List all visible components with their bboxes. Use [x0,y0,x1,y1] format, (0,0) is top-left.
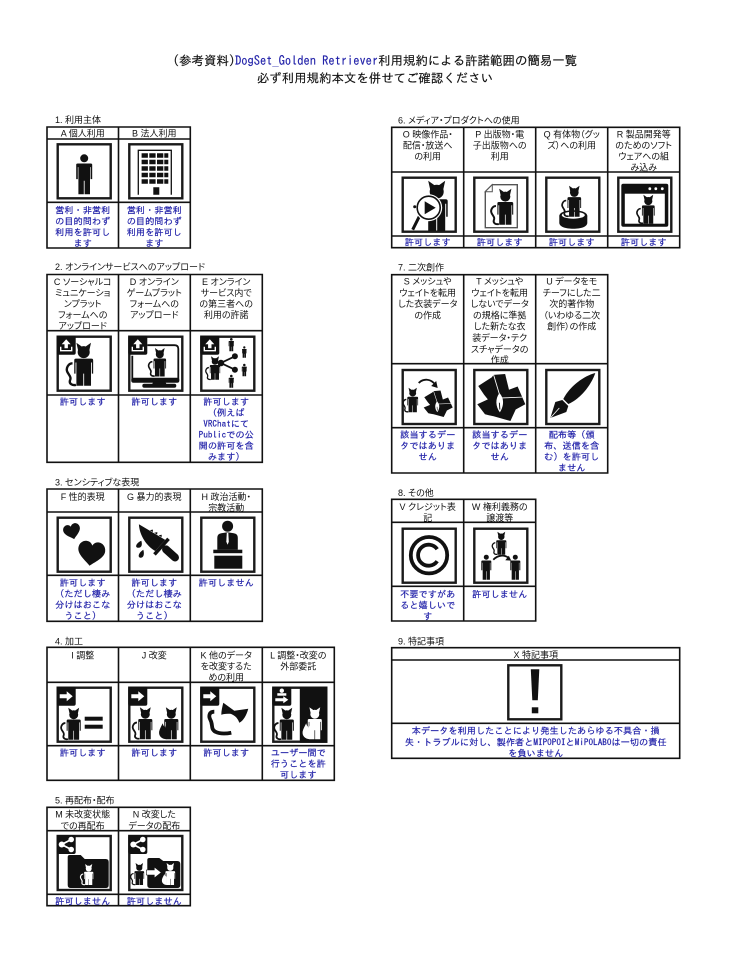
permission: K: 許可します [203,748,249,758]
icon: goods figure [546,178,599,232]
permission: Q: 許可します [549,238,595,248]
header: V: 記 [423,513,432,523]
icon: copyright [403,529,456,583]
header: K: めの利用 [208,672,244,682]
header: D: アップロード [130,310,179,320]
header: R: のためのソフト [615,140,672,150]
permission: G: （ただし棲み [127,589,182,599]
permission: U: 布、送信を含 [544,441,600,451]
header: T: スチャデータの [471,343,529,354]
permission: X: 失・トラブルに対し、製作者とMIPOPOIとMiPOLABOは一切の責任 [405,738,667,748]
header: B: B 法人利用 [132,128,177,138]
title [173,54,577,84]
header: D: D オンライン [130,277,179,287]
header: O: 配信・放送へ [403,140,453,150]
permission: B: 利用を許可し [127,228,182,238]
permission: S: 該当するデー [400,430,455,440]
panel: 4 加工: 4. 加工 [55,636,83,646]
permission: B: 営利・非営利 [127,206,182,216]
panel: 4 加工 [47,636,334,780]
icon: new clothing [474,370,527,424]
permission: M: 許可しません [55,896,110,906]
icon: upload avatar [57,336,111,391]
permission: B: ます [145,240,163,248]
permission: V: す [423,612,432,622]
permission: A: 利用を許可し [55,228,110,238]
header: W: 譲渡等 [486,512,513,523]
header: R: R 製品開発等 [617,128,671,140]
panel: 2 オンラインサービスへのアップロード [47,262,262,462]
permission: C: 許可します [60,397,106,407]
permission: E: VRChatにて [203,420,249,429]
header: E: 利用の許諾 [204,309,249,320]
permission: S: タではありま [400,441,455,451]
header: R: ウェアへの組 [618,150,669,162]
header: V: V クレジット表 [400,502,456,512]
header: R: み込み [630,162,657,172]
header: S: の作成 [414,309,441,320]
permission: L: ユーザー間で [271,748,326,758]
header: H: H 政治活動・ [201,491,251,502]
header: U: U データをモ [546,276,597,286]
permission: X: を負いません [508,748,563,758]
header: N: データの配布 [128,820,180,831]
permission: G: 分けはおこな [127,600,182,610]
permission: L: 行うことを許 [271,759,326,769]
header: K: を改変するた [201,660,252,672]
icon: adjust [57,687,111,742]
permission: F: 分けはおこな [55,600,110,610]
icon: rights transfer [474,529,527,583]
header: E: サービス内で [200,287,252,298]
header: L: 外部委託 [280,660,316,672]
icon: fountain pen [546,370,599,424]
permission: F: 許可します [60,578,106,588]
icon: modify [128,687,182,742]
permission: E: 許可します [203,397,249,407]
permission: R: 許可します [621,238,667,248]
header: G: G 暴力的表現 [127,491,182,502]
panel: 9 特記事項 [392,636,680,758]
header: T: しないでデータ [471,298,529,309]
header: Q: ズ）への利用 [547,140,596,150]
permission: F: うこと） [64,611,101,621]
icon: exclamation [508,665,561,719]
icon: software window [618,178,671,232]
header: M: での再配布 [60,820,105,831]
permission: X: 本データを利用したことにより発生したあらゆる不具合・損 [412,726,660,736]
header: W: W 権利義務の [472,501,528,512]
permission: G: うこと） [136,611,173,621]
header: O: O 映像作品・ [403,128,453,140]
header: H: 宗教活動 [208,502,244,513]
header: C: アップロード [58,321,107,331]
header: D: ゲームプラット [127,287,182,298]
header: J: J 改変 [142,650,167,660]
header: N: N 改変した [133,808,176,820]
icon: modified data folder [128,835,182,890]
panel: 9 特記事項: 9. 特記事項 [398,636,444,646]
header: U: 次的著作物 [549,298,594,309]
permission: P: 許可します [477,238,523,248]
panel: 8 その他 [392,487,536,622]
icon: person [58,144,111,198]
permission: U: 配布等（頒 [549,430,595,440]
permission: H: 許可しません [199,578,254,588]
header: D: フォームへの [130,299,179,309]
header: L: L 調整・改変の [270,650,327,660]
icon: parts reuse [200,687,254,742]
panel: 1 利用主体: 1. 利用主体 [55,114,101,125]
panel: 5 再配布・配布: 5. 再配布・配布 [55,794,115,806]
icon: hearts [58,518,111,572]
header: T: 作成 [491,354,509,365]
header: X: X 特記事項 [513,649,558,660]
header: C: ンプラット [64,299,102,309]
header: P: 子出版物への [473,140,527,150]
title: (参考資料)DogSet_Golden Retriever利用規約による許諾範囲の簡易一覧 [173,54,577,67]
permission: A: ます [74,240,92,248]
header: Q: Q 有体物（グッ [544,128,600,140]
permission: J: 許可します [131,748,177,758]
header: T: した新たな衣 [474,321,526,332]
header: T: T メッシュや [476,276,524,286]
permission: T: せん [491,452,509,462]
permission: A: の目的問わず [55,217,110,227]
permission: E: 開の許可を含 [199,441,255,451]
header: U: （いわゆる二次 [543,309,600,320]
icon: publication [474,178,527,232]
header: I: I 調整 [71,650,94,660]
header: E: E オンライン [202,277,251,287]
header: O: の利用 [414,150,441,162]
panel: 7 二次創作: 7. 二次創作 [398,262,444,272]
header: S: S メッシュや [404,276,452,286]
permission: B: の目的問わず [127,217,182,227]
permission: D: 許可します [131,397,177,407]
panel: 5 再配布・配布 [47,794,190,906]
permission: T: 該当するデー [472,430,527,440]
icon: upload to game [128,336,182,391]
panel: 3 センシティブな表現: 3. センシティブな表現 [55,476,139,488]
permission: T: タではありま [472,441,527,451]
icon: politician at lectern [201,518,254,572]
permission: A: 営利・非営利 [55,206,110,216]
header: K: K 他のデータ [201,650,252,660]
header: P: 利用 [491,150,509,162]
permission: E: Publicでの公 [199,430,254,440]
permission: E: （例えば [208,408,245,418]
header: C: C ソーシャルコ [54,277,112,287]
icon: video [403,178,456,232]
panel: 1 利用主体 [47,114,190,248]
panel: 8 その他: 8. その他 [398,487,434,498]
header: T: の規格に準拠 [473,309,526,320]
icon: building [129,144,182,198]
permission: V: 不要ですがあ [400,590,455,600]
header: C: フォームへの [58,310,108,320]
icon: knife [129,518,184,572]
header: F: F 性的表現 [61,491,105,502]
header: E: の第三者への [199,298,253,309]
icon: outsourcing [272,687,327,743]
header: A: A 個人利用 [61,128,105,138]
panel: 6 メディア・プロダクトへの使用: 6. メディア・プロダクトへの使用 [398,114,520,126]
permission: I: 許可します [60,748,106,758]
header: P: P 出版物・電 [475,128,524,140]
panel: 2 オンラインサービスへのアップロード: 2. オンラインサービスへのアップロード [55,262,205,272]
permission: S: せん [419,452,437,462]
title: 必ず利用規約本文を併せてご確認ください [257,72,493,84]
header: T: ウェイトを転用 [471,288,528,298]
header: S: ウェイトを転用 [399,288,456,298]
panel: 7 二次創作 [392,262,608,473]
header: M: M 未改変状態 [55,808,110,820]
permission: O: 許可します [405,238,451,248]
permission: E: みます） [208,452,245,462]
panel: 6 メディア・プロダクトへの使用 [392,114,680,248]
permission: W: 許可しません [472,590,527,600]
permission: F: （ただし棲み [55,589,110,599]
header: U: 創作）の作成 [547,321,596,332]
header: C: ミュニケーショ [55,288,110,298]
header: S: した衣装データ [398,298,457,309]
permission: N: 許可しません [127,896,182,906]
permission: L: 可します [280,771,317,780]
permission: U: ません [558,463,585,473]
permission: V: ると嬉しいで [400,600,455,610]
icon: redistribute folder [57,835,111,890]
icon: clothing from mesh [403,370,456,424]
permission: G: 許可します [131,578,177,588]
header: U: チーフにした二 [542,288,601,298]
header: T: 装データ・テク [472,332,527,343]
icon: third-party sharing [200,336,254,391]
permission: U: む）を許可し [544,452,599,462]
panel: 3 センシティブな表現 [47,476,262,621]
